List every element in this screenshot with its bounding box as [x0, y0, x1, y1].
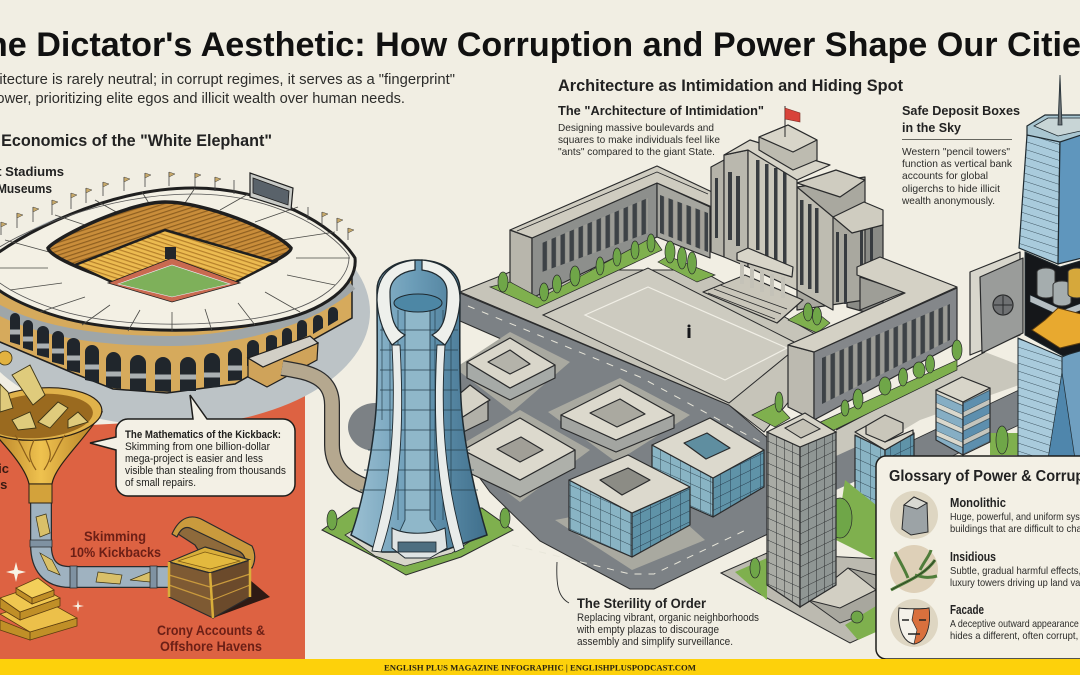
- block: glass building 5: [652, 418, 764, 517]
- tower entrance: [392, 528, 447, 558]
- stadium roof: [0, 188, 355, 330]
- block: safe deposit boxes: [901, 103, 1020, 207]
- block: architecture of intimidation: Designing massive boulevards and: [558, 122, 714, 134]
- tower shadow: [348, 403, 402, 451]
- term: monolithic: Monolithic: [950, 496, 1006, 510]
- vault door: [970, 252, 1023, 355]
- footer bar: [0, 659, 1080, 675]
- sparkles: [6, 562, 84, 612]
- icon: mask: [890, 599, 938, 647]
- stadium seating bowl: [48, 202, 291, 297]
- block: architecture of intimidation: "ants" compared to the giant State.: [558, 146, 715, 158]
- label: crony accounts: Offshore Havens: [160, 639, 262, 654]
- block: sterility of order: Replacing vibrant, organic neighborhoods: [577, 612, 759, 624]
- label: crony accounts: [157, 623, 265, 654]
- block: sterility of order: [557, 562, 759, 648]
- block: safe deposit boxes: Safe Deposit Boxes: [902, 103, 1020, 118]
- block: striped tower: [936, 377, 990, 455]
- stadium wall: [0, 268, 352, 393]
- block: glass tower: [855, 415, 914, 555]
- block: glass building 6: [555, 455, 705, 570]
- tower glass grid: [360, 310, 478, 520]
- block: sterility of order: assembly and simplify surveillance.: [577, 636, 733, 648]
- tower white crown: [377, 260, 415, 345]
- label: skimming kickbacks: 10% Kickbacks: [70, 545, 161, 560]
- portico and stairs: [703, 248, 830, 333]
- block: low building 1: [455, 332, 570, 412]
- block: safe deposit boxes: function as vertical bank: [902, 158, 1013, 170]
- flag: red banner: [785, 106, 800, 137]
- label: skimming kickbacks: [70, 529, 161, 560]
- block: sterility of order: with empty plazas to discourage: [576, 624, 719, 636]
- label: crony accounts: Crony Accounts &: [157, 623, 265, 638]
- intro text: [0, 71, 455, 107]
- heading: intimidation and hiding spot: Architecture as Intimidation and Hiding Spot: [558, 76, 903, 95]
- block: safe deposit boxes: Western "pencil towers": [902, 146, 1010, 158]
- central curved glass tower: [322, 260, 513, 575]
- red money-flow panel: [0, 390, 305, 659]
- treasure chest: [169, 517, 270, 618]
- block: grey high-rise with pad: [721, 413, 900, 643]
- block: sterility of order: The Sterility of Order: [577, 595, 707, 611]
- block: safe deposit boxes: wealth anonymously.: [901, 195, 995, 207]
- label: cut-off funnel caption: [0, 461, 9, 492]
- gold bars: [0, 578, 77, 640]
- block: safe deposit boxes: accounts for global: [902, 170, 988, 182]
- figure: lone person in plaza: [688, 324, 690, 338]
- stadium ground shadow: [0, 198, 370, 426]
- roof ribs: [0, 188, 350, 332]
- building: central ministry tower: [711, 125, 883, 317]
- wing: left wing of ministry: [510, 166, 712, 298]
- pipe: stadium to tower: [282, 368, 365, 486]
- scoreboard: [250, 173, 293, 210]
- block: safe deposit boxes: oligerchs to hide illicit: [902, 183, 1000, 195]
- trees along right wing: [752, 340, 962, 432]
- stadium: [0, 172, 355, 393]
- tower fins: [372, 345, 464, 552]
- gold funnel: [0, 351, 104, 503]
- block: architecture of intimidation: The "Architecture of Intimidation": [558, 103, 764, 118]
- callout: mathematics of the kickback: The Mathematics of the Kickback:: [125, 429, 281, 441]
- callout: mathematics of the kickback: of small repairs.: [125, 477, 196, 489]
- banknotes: [0, 365, 88, 430]
- tower central core: [398, 310, 440, 535]
- stadium arcade: [10, 307, 338, 392]
- hedge: grass and trees: [490, 234, 715, 308]
- roof rim line: [0, 194, 349, 324]
- section: city ground and roads: [445, 268, 1019, 589]
- block: low building 4: [548, 378, 690, 462]
- block: low building 2: [450, 385, 490, 436]
- pitch: [108, 258, 240, 302]
- vault contents: [1025, 252, 1080, 356]
- term: facade: Facade: [950, 603, 984, 617]
- block: safe deposit boxes: in the Sky: [902, 120, 962, 135]
- tower body: [351, 260, 487, 552]
- term: insidious: [950, 550, 1080, 589]
- term: facade: [950, 603, 1080, 642]
- flags: [1, 172, 348, 240]
- tower lawn: [322, 508, 513, 575]
- block: low building 3: [452, 410, 590, 502]
- block: architecture of intimidation: [558, 103, 764, 158]
- arcade grey balustrade: [10, 332, 242, 377]
- icon: monolith: [890, 491, 938, 539]
- term: monolithic: [950, 496, 1080, 535]
- callout: mathematics of the kickback: [90, 395, 295, 496]
- callout: mathematics of the kickback: visible than stealing from thousands: [125, 465, 286, 477]
- block: architecture of intimidation: squares to make individuals feel like: [558, 134, 720, 146]
- callout: mathematics of the kickback: Skimming from one billion-dollar: [125, 441, 270, 453]
- term: insidious: Insidious: [950, 550, 996, 564]
- blue pencil tower: [1018, 75, 1080, 459]
- label: skimming kickbacks: Skimming: [84, 529, 146, 544]
- wing: right lower wing: [788, 257, 957, 420]
- icon: thorny vine: [890, 545, 938, 593]
- pipe: funnel to chest: [30, 503, 172, 588]
- footer bar: ENGLISH PLUS MAGAZINE INFOGRAPHIC | ENGLISHPLUSPODCAST.COM: [384, 662, 696, 672]
- stadium annex: [248, 336, 318, 387]
- stadium frieze: [0, 285, 352, 341]
- glossary panel: [876, 456, 1080, 659]
- label: stadiums and museums: [0, 165, 64, 196]
- callout: mathematics of the kickback: mega-project is easier and less: [125, 453, 263, 465]
